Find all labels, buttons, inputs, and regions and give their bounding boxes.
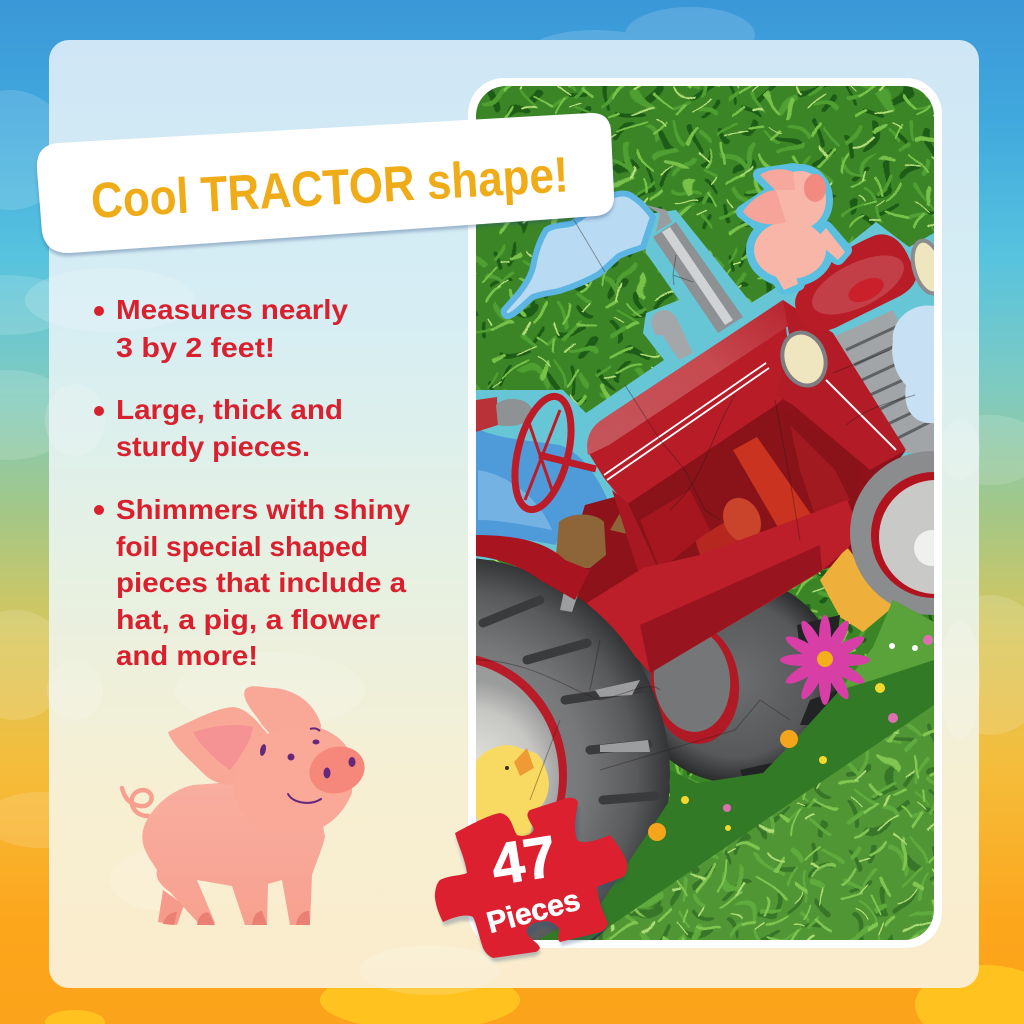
pig tail xyxy=(122,788,152,816)
bullet 3: foil special shaped xyxy=(116,531,368,562)
hood panel xyxy=(588,300,793,505)
pig hooves xyxy=(163,911,310,925)
lower frame xyxy=(587,500,860,673)
duck xyxy=(476,745,549,836)
farmer leg xyxy=(476,428,612,545)
badge number: 47 xyxy=(487,824,561,898)
hood strut xyxy=(612,490,656,571)
rear wheel xyxy=(476,558,670,940)
puzzle piece badge xyxy=(435,798,628,962)
panel clouds xyxy=(25,268,980,995)
pig head xyxy=(234,727,352,834)
farmer arm xyxy=(476,397,533,432)
bullet 1: 3 by 2 feet! xyxy=(116,332,275,363)
pig front ear xyxy=(168,707,267,785)
bullet 3: hat, a pig, a flower xyxy=(116,604,380,635)
front wheel xyxy=(850,451,934,615)
small pig backing xyxy=(743,170,845,288)
right headlight xyxy=(910,238,934,296)
pillar stripe xyxy=(826,380,896,450)
bullet 3: pieces that include a xyxy=(116,567,406,598)
bullet 3: and more! xyxy=(116,640,258,671)
cap highlight xyxy=(812,256,904,314)
hood stripe xyxy=(604,363,769,480)
boot xyxy=(556,513,632,568)
badge label: Pieces xyxy=(483,884,584,940)
pig face details xyxy=(259,728,356,803)
engine bay xyxy=(640,426,850,564)
grainy highlight band xyxy=(587,300,790,455)
bullet 2: sturdy pieces. xyxy=(116,431,310,462)
ground strip xyxy=(520,600,934,950)
fender xyxy=(476,535,590,600)
pig body and legs xyxy=(142,782,325,925)
bullet 1 xyxy=(94,294,348,363)
under-hood red fill xyxy=(577,399,905,606)
puzzle photo frame xyxy=(468,78,942,948)
tread lugs xyxy=(483,600,655,800)
strip light edge xyxy=(840,600,934,690)
tyre edge lug xyxy=(560,582,650,752)
sun xyxy=(820,547,893,632)
grille xyxy=(833,310,934,453)
bullet list xyxy=(94,294,410,671)
puzzle backing outline xyxy=(476,210,934,560)
bullet 1: Measures nearly xyxy=(116,294,348,325)
exhaust pipe xyxy=(646,205,743,360)
steering wheel xyxy=(505,391,596,515)
flower xyxy=(780,615,870,705)
small pig xyxy=(743,169,845,290)
pig far back leg xyxy=(158,890,184,925)
small flowers xyxy=(648,635,933,841)
sheep xyxy=(892,305,934,423)
bullet 3 xyxy=(94,494,410,671)
puzzle piece seams xyxy=(476,220,915,800)
middle wheel xyxy=(632,577,840,783)
headlight xyxy=(780,330,828,388)
front pillar xyxy=(776,300,906,470)
pig snout xyxy=(303,740,371,800)
pig inner ear xyxy=(193,725,253,770)
bullet 3: Shimmers with shiny xyxy=(116,494,410,525)
tractor body xyxy=(587,234,949,673)
small pig body xyxy=(743,169,845,290)
pig illustration xyxy=(122,686,371,925)
title banner xyxy=(37,113,614,256)
cap emblem xyxy=(848,278,884,302)
grass background xyxy=(476,86,934,940)
tractor puzzle image xyxy=(476,86,934,940)
smoke cloud xyxy=(504,194,653,316)
bullet 2: Large, thick and xyxy=(116,394,343,425)
title text: Cool TRACTOR shape! xyxy=(89,146,570,229)
bullet 2 xyxy=(94,394,343,462)
pig back ear xyxy=(244,686,321,745)
radiator cap panel xyxy=(795,234,916,331)
